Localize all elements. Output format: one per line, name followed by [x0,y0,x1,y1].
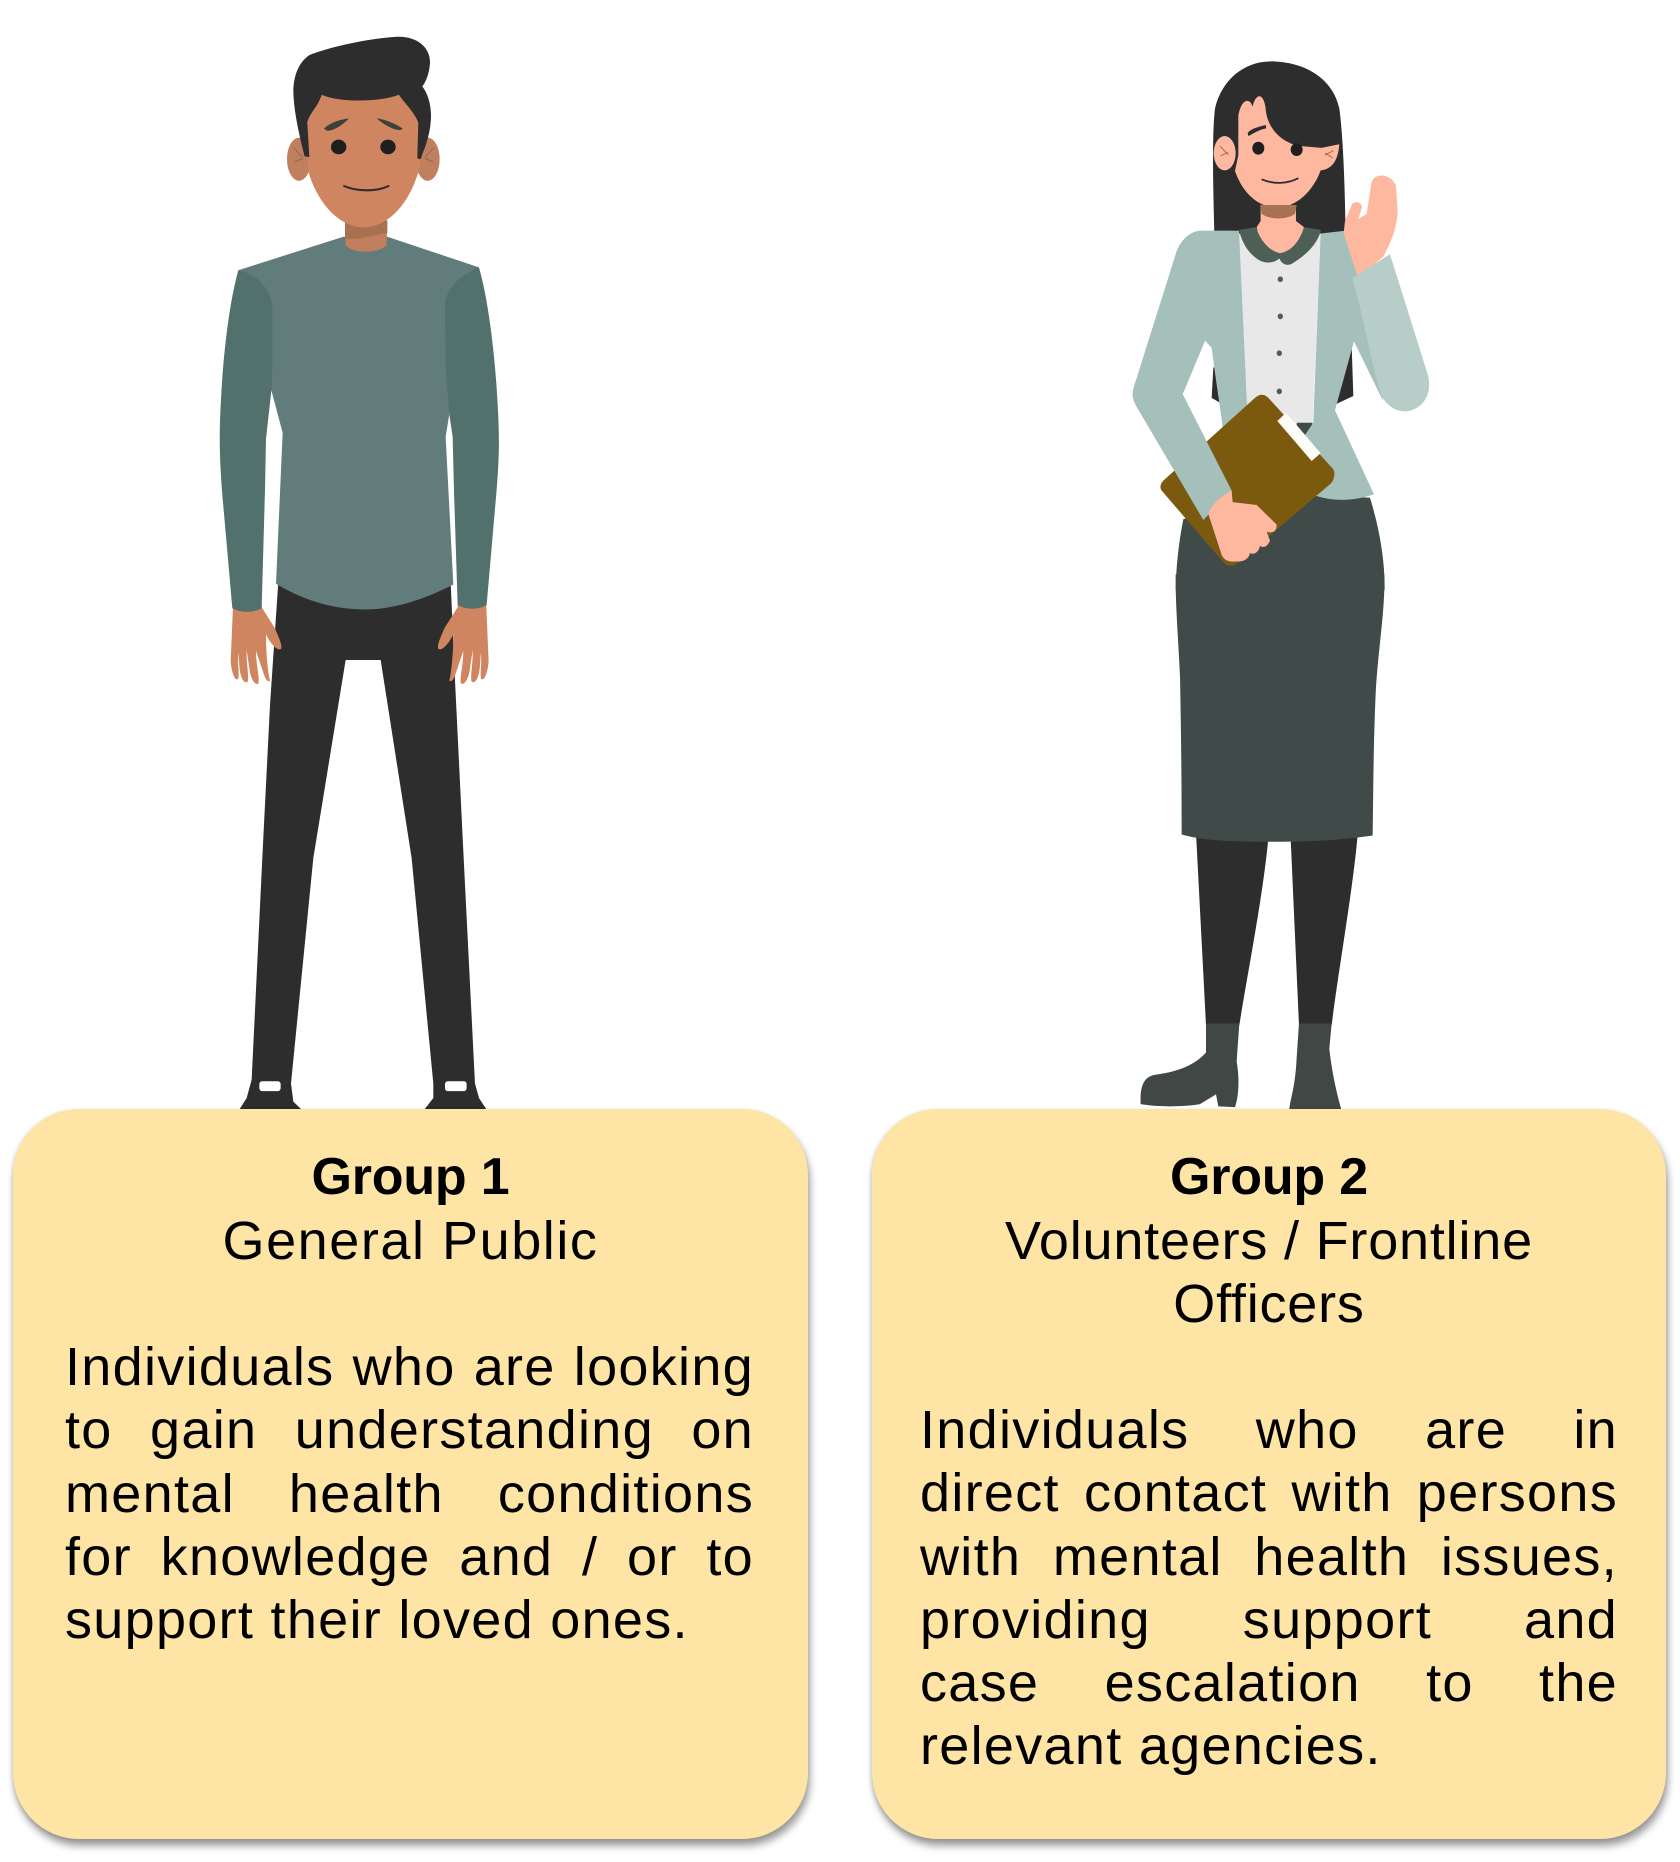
panel: Group 1 card [13,1109,808,1839]
heading: Group 1: Group 1 [312,1148,509,1206]
figure: man, Group 1 [220,37,499,1110]
text block: Group 2 description: direct contact with persons [920,1463,1618,1523]
figure: woman, Group 2 [1133,61,1429,1111]
text block: Group 2 description: relevant agencies. [920,1716,1382,1776]
text block: Group 1 description: mental health conditions [65,1464,754,1524]
text block: Group 1 description: Individuals who are looking [65,1337,754,1397]
woman upper body, head and clipboard [1133,61,1429,590]
text block: Group 1 description [65,1337,754,1650]
clipboard [1160,395,1334,566]
text block: Group 2 description: providing support and [920,1590,1618,1650]
text block: Group 2 description [920,1400,1618,1776]
subheading: General Public: General Public [223,1211,598,1271]
subheading: Volunteers / Frontline Officers: Volunteers / Frontline [1005,1211,1533,1271]
text block: Group 2 description: with mental health issues, [920,1527,1618,1587]
subheading: Volunteers / Frontline Officers: Officers [1173,1274,1365,1334]
text block: Group 1 description: for knowledge and / or to [65,1527,754,1587]
text block: Group 1 description: support their loved ones. [65,1590,689,1650]
panel: Group 2 card [872,1109,1666,1839]
text block: Group 1 description: to gain understanding on [65,1400,754,1460]
heading: Group 2: Group 2 [1170,1148,1368,1206]
man torso, head and arms [220,37,499,612]
man legs and shoes [231,582,489,1110]
woman skirt lower, legs and boots [1141,575,1384,1111]
subheading: Volunteers / Frontline Officers [1005,1211,1533,1334]
text block: Group 2 description: case escalation to the [920,1653,1618,1713]
text block: Group 2 description: Individuals who are in [920,1400,1618,1460]
